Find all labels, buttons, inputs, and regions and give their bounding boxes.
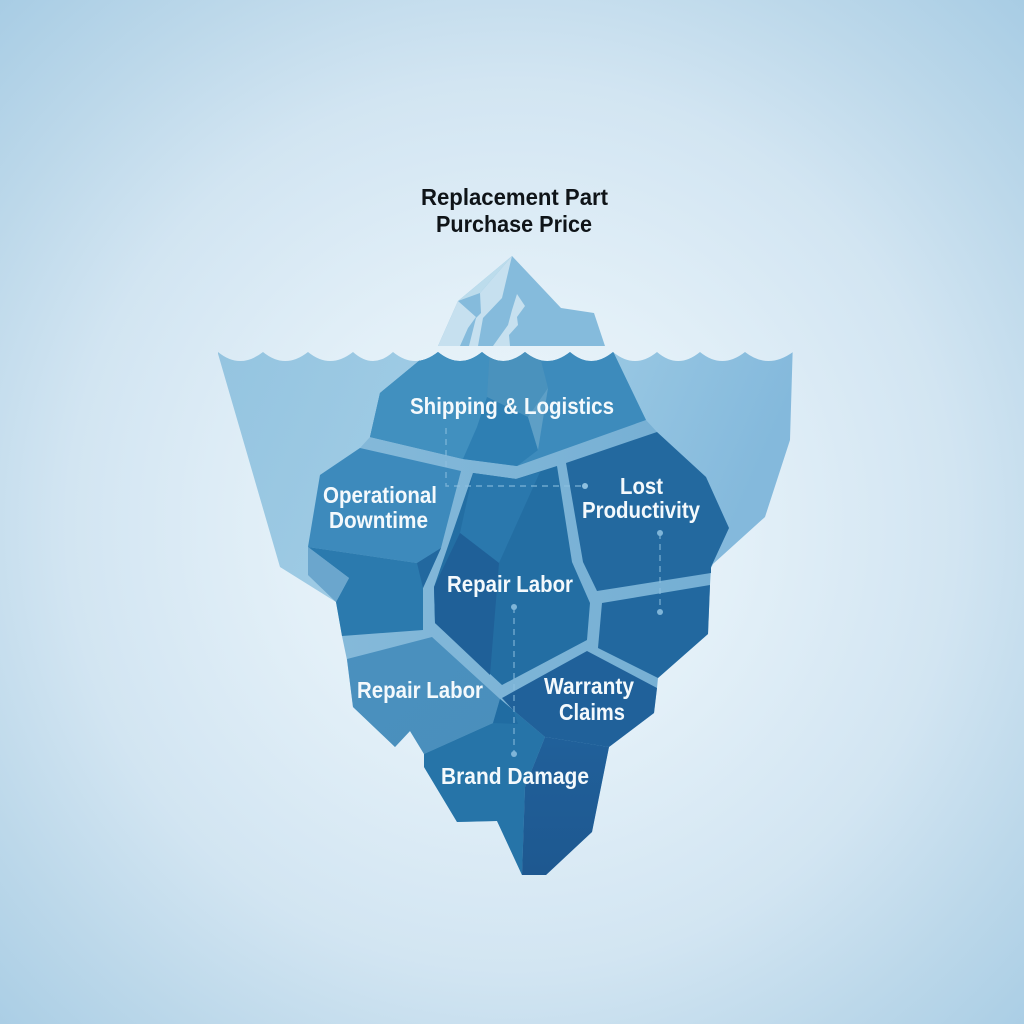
- dashed connector: shipping to lost productivity: [446, 428, 588, 489]
- panel: brand damage: [424, 699, 609, 875]
- panel: repair labor left: [347, 637, 500, 754]
- dashed connector: repair labor to brand damage: [511, 604, 517, 757]
- title: Replacement Part: [421, 184, 608, 210]
- label: operational downtime: [323, 482, 437, 533]
- label: shipping and logistics: Shipping & Logistics: [410, 393, 614, 419]
- title: [421, 184, 608, 237]
- panel: operational downtime: [308, 448, 461, 636]
- label: operational downtime: Operational: [323, 482, 437, 508]
- panel: shipping and logistics: [370, 345, 646, 466]
- iceberg base and crack bands: [336, 352, 711, 875]
- label: repair labor left: Repair Labor: [357, 677, 483, 703]
- label: repair labor center: Repair Labor: [447, 571, 573, 597]
- water wedge behind iceberg: [214, 340, 793, 602]
- iceberg tip above water: [438, 256, 605, 346]
- label: lost productivity: Productivity: [582, 497, 700, 523]
- title: Purchase Price: [436, 211, 592, 237]
- label: lost productivity: Lost: [620, 473, 663, 499]
- label: warranty claims: Warranty: [544, 673, 634, 699]
- panel: lower right block: [598, 585, 710, 678]
- underwater iceberg: [214, 340, 793, 875]
- dashed connector: lost productivity: [657, 530, 663, 615]
- iceberg infographic: [218, 188, 793, 875]
- panel: warranty claims: [502, 651, 657, 747]
- panel: lost productivity: [566, 432, 729, 591]
- label: operational downtime: Downtime: [329, 507, 428, 533]
- label: warranty claims: [544, 673, 634, 725]
- label: brand damage: Brand Damage: [441, 763, 589, 789]
- label: warranty claims: Claims: [559, 699, 625, 725]
- label: lost productivity: [582, 473, 700, 523]
- panel: repair labor center: [434, 466, 590, 685]
